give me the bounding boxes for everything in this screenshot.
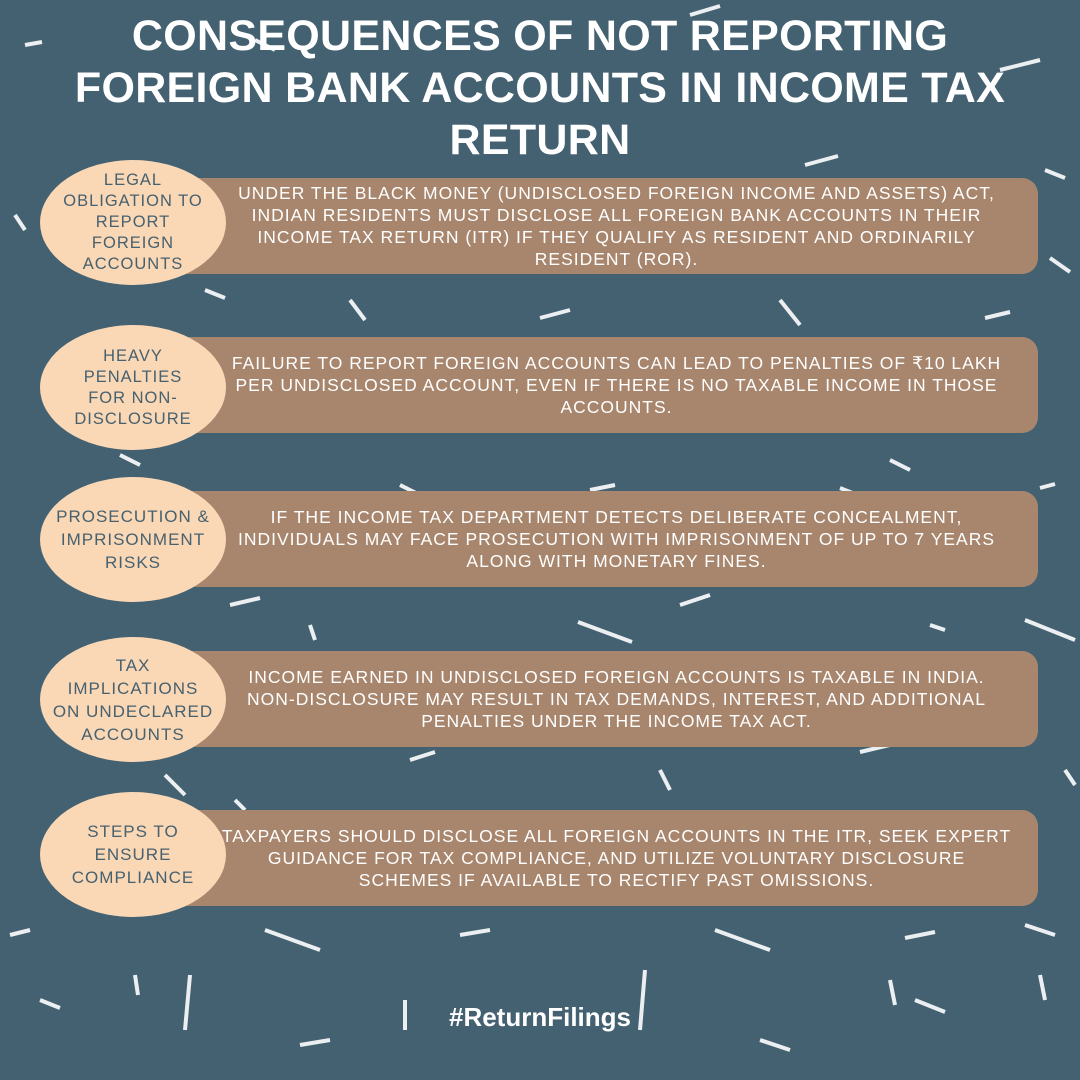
panel: prosecution: ALONG WITH MONETARY FINES.	[466, 551, 767, 571]
oval: tax implications: IMPLICATIONS	[68, 678, 198, 698]
oval: prosecution	[40, 477, 226, 602]
oval: compliance	[40, 792, 226, 917]
panel: tax implications: INCOME EARNED IN UNDISCLOSED FOREIGN ACCOUNTS IS TAXABLE IN INDIA.	[248, 667, 985, 687]
panel: legal obligation	[175, 178, 1038, 274]
oval: heavy penalties: DISCLOSURE	[74, 410, 192, 428]
oval: legal obligation: FOREIGN	[92, 234, 174, 252]
panel: heavy penalties	[175, 337, 1038, 433]
hashtag: #ReturnFilings	[449, 1002, 631, 1032]
oval: compliance: ENSURE	[95, 845, 171, 864]
oval: tax implications: ACCOUNTS	[81, 724, 185, 744]
title: FOREIGN BANK ACCOUNTS IN INCOME TAX	[75, 64, 1005, 112]
oval: tax implications: ON UNDECLARED	[53, 702, 213, 720]
oval: prosecution: PROSECUTION &	[56, 507, 210, 526]
panel: prosecution: IF THE INCOME TAX DEPARTMENT DETECTS DELIBERATE CONCEALMENT,	[271, 507, 962, 527]
oval: heavy penalties: FOR NON-	[88, 388, 178, 406]
panel: heavy penalties: PER UNDISCLOSED ACCOUNT, EVEN IF THERE IS NO TAXABLE INCOME IN THOSE	[236, 375, 997, 395]
panel: tax implications: PENALTIES UNDER THE INCOME TAX ACT.	[421, 711, 812, 731]
panel: compliance: TAXPAYERS SHOULD DISCLOSE ALL FOREIGN ACCOUNTS IN THE ITR, SEEK EXPERT	[222, 826, 1011, 846]
panel: legal obligation: UNDER THE BLACK MONEY (UNDISCLOSED FOREIGN INCOME AND ASSETS) ACT,	[238, 183, 995, 203]
oval: legal obligation: REPORT	[96, 213, 170, 231]
oval: legal obligation: ACCOUNTS	[83, 255, 183, 273]
panel: heavy penalties: ACCOUNTS.	[560, 397, 673, 417]
oval: tax implications	[40, 637, 226, 762]
panel: compliance: GUIDANCE FOR TAX COMPLIANCE, AND UTILIZE VOLUNTARY DISCLOSURE	[268, 848, 965, 868]
oval: heavy penalties: PENALTIES	[84, 368, 182, 386]
oval: heavy penalties	[40, 325, 226, 450]
oval: compliance: COMPLIANCE	[72, 868, 194, 887]
oval: tax implications: TAX	[116, 656, 150, 674]
panel: legal obligation: RESIDENT (ROR).	[535, 249, 698, 269]
oval: legal obligation: LEGAL	[104, 171, 162, 189]
title: RETURN	[450, 116, 630, 164]
panel: legal obligation: INCOME TAX RETURN (ITR) IF THEY QUALIFY AS RESIDENT AND ORDINARILY	[257, 227, 976, 247]
oval: legal obligation	[40, 160, 226, 285]
panel: heavy penalties: FAILURE TO REPORT FOREIGN ACCOUNTS CAN LEAD TO PENALTIES OF ₹10 LAKH	[232, 353, 1001, 373]
panel: tax implications	[175, 651, 1038, 747]
title	[75, 12, 1005, 164]
panel: prosecution: INDIVIDUALS MAY FACE PROSECUTION WITH IMPRISONMENT OF UP TO 7 YEARS	[238, 529, 995, 549]
oval: compliance: STEPS TO	[87, 822, 179, 841]
oval: legal obligation: OBLIGATION TO	[63, 192, 203, 210]
panel: tax implications: NON-DISCLOSURE MAY RESULT IN TAX DEMANDS, INTEREST, AND ADDITIONAL	[247, 689, 986, 709]
panel: compliance: SCHEMES IF AVAILABLE TO RECTIFY PAST OMISSIONS.	[359, 870, 874, 890]
oval: heavy penalties: HEAVY	[103, 346, 163, 364]
oval: prosecution: IMPRISONMENT	[61, 530, 205, 549]
title: CONSEQUENCES OF NOT REPORTING	[132, 12, 948, 60]
panel: prosecution	[175, 491, 1038, 587]
panel: legal obligation: INDIAN RESIDENTS MUST DISCLOSE ALL FOREIGN BANK ACCOUNTS IN THEIR	[252, 205, 981, 225]
oval: prosecution: RISKS	[105, 553, 161, 572]
panel: compliance	[175, 810, 1038, 906]
